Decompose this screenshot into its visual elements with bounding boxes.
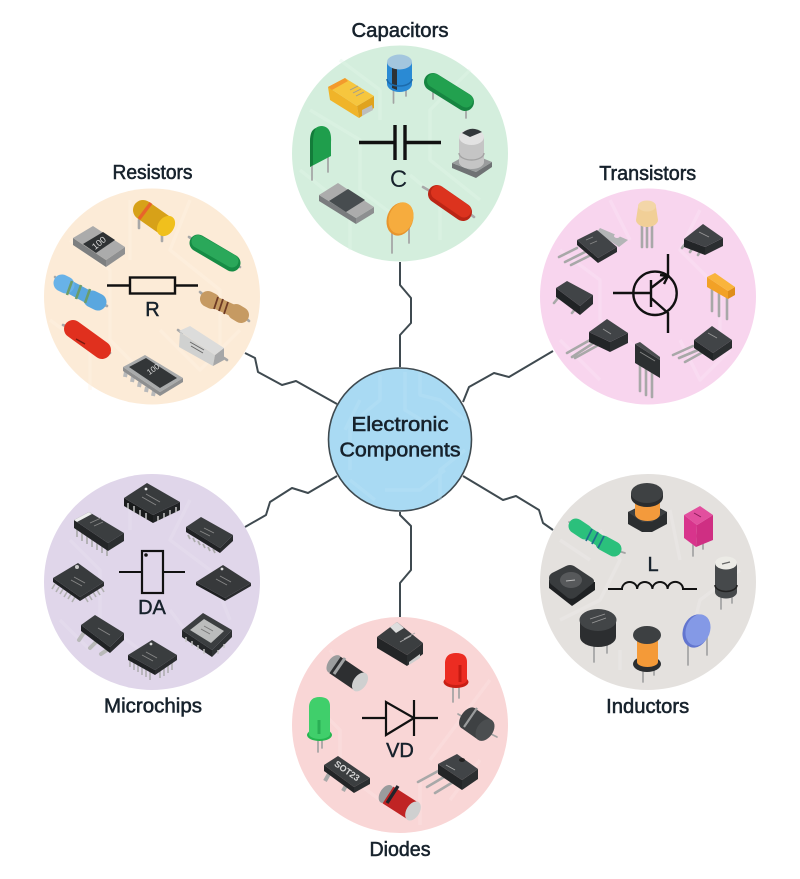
transistors circle: [540, 188, 756, 404]
hub circle: [328, 368, 472, 511]
icon: SOIC chip right: [186, 517, 233, 553]
capacitor symbol: C: [390, 166, 407, 193]
icon: red MELF diode: [376, 782, 424, 823]
heading: Microchips: Microchips: [104, 696, 202, 718]
heading: Capacitors: Capacitors: [352, 20, 448, 42]
icon: grey SMD capacitor: [319, 183, 374, 224]
icon: QFP chip: [52, 563, 104, 602]
icon: TO-92 beige transistor: [636, 200, 658, 247]
diodes circle: [292, 617, 508, 833]
icon: pink box component: [684, 506, 713, 556]
icon: leadless chip: [124, 483, 180, 523]
capacitors circle: [292, 46, 508, 262]
icon: orange disc capacitor: [382, 199, 418, 253]
hub title: Electronic: [352, 414, 448, 436]
icon: resistor network chip 100: [123, 355, 183, 396]
panel: transistors: [540, 163, 756, 404]
icon: TO-220 transistor: [559, 228, 628, 265]
inductor symbol: [608, 554, 697, 589]
icon: three-leg regulator: [79, 615, 124, 654]
resistor symbol: [107, 278, 198, 321]
hub title: [340, 414, 460, 462]
icon: PLCC chip: [182, 613, 232, 657]
panel: diodes: [292, 617, 508, 861]
icon: transistor with long leads: [567, 319, 628, 358]
microchips circle: [44, 474, 260, 690]
icon: green resistor: [189, 237, 240, 267]
icon: black axial diode: [455, 704, 498, 744]
icon: bridge diode: [418, 754, 478, 793]
icon: black cylinder capacitor: [715, 556, 737, 609]
icon: green axial capacitor: [433, 80, 466, 118]
icon: yellow tantalum capacitor: [328, 78, 374, 118]
icon: blue disc capacitor: [678, 611, 715, 665]
panel: inductors: [540, 474, 756, 718]
panel: central hub: [328, 368, 472, 511]
icon: ceramic box resistor: [178, 326, 227, 366]
heading: Inductors: Inductors: [606, 696, 689, 718]
icon: silver SMD capacitor: [452, 129, 492, 178]
hub title: Components: [340, 440, 460, 462]
icon: green resistor: [569, 522, 625, 553]
panel: resistors: [44, 162, 260, 404]
diode symbol: [362, 700, 438, 762]
icon: SOT23 diode: [324, 756, 370, 793]
icon: SOT23 diode: SOT23: [332, 759, 362, 783]
icon: green disc capacitor: [310, 126, 331, 180]
icon: red resistor: [63, 325, 110, 353]
icon: red LED: [444, 653, 468, 702]
capacitor symbol: [359, 125, 441, 193]
heading: Transistors: Transistors: [599, 163, 696, 185]
icon: brown resistor: [200, 292, 249, 321]
integrated circuit symbol: DA: [138, 597, 167, 619]
inductor symbol: L: [647, 554, 659, 576]
icon: yellow axial resistor: [139, 203, 179, 241]
inductors circle: [540, 474, 756, 690]
icon: resistor network chip 100: 100: [145, 362, 162, 377]
icon: DIP chip: [74, 512, 124, 556]
resistors circle: [44, 188, 260, 404]
icon: orange trimmer: [707, 273, 735, 319]
connector wires: [245, 262, 553, 617]
icon: upright transistor: [635, 342, 660, 397]
icon: SOT power transistor: [682, 224, 723, 255]
icon: flat QFN chip: [196, 565, 251, 601]
icon: chip resistor 100: [73, 226, 125, 267]
icon: orange power inductor: [628, 483, 667, 532]
icon: SOT small transistor: [554, 281, 593, 315]
transistor symbol: [613, 254, 677, 333]
icon: chip resistor 100: 100: [90, 234, 108, 252]
icon: flat transistor with leads: [673, 326, 732, 362]
icon: orange spool inductor: [633, 626, 661, 682]
heading: Resistors: Resistors: [112, 162, 192, 184]
panel: microchips: [44, 474, 260, 718]
icon: dark drum inductor: [580, 609, 616, 662]
icon: green LED: [307, 697, 332, 752]
icon: blue resistor: [55, 277, 107, 306]
icon: SMD diode: [377, 622, 423, 666]
diode symbol: VD: [386, 740, 414, 762]
icon: red axial capacitor: [423, 187, 474, 217]
icon: square dark inductor: [549, 565, 595, 606]
icon: black MELF diode: [323, 652, 371, 694]
icon: square pin chip: [128, 640, 177, 680]
heading: Diodes: Diodes: [370, 839, 430, 861]
resistor symbol: R: [145, 299, 160, 321]
panel: capacitors: [292, 20, 508, 262]
integrated circuit symbol: [119, 551, 185, 619]
icon: blue electrolytic capacitor: [387, 54, 412, 103]
